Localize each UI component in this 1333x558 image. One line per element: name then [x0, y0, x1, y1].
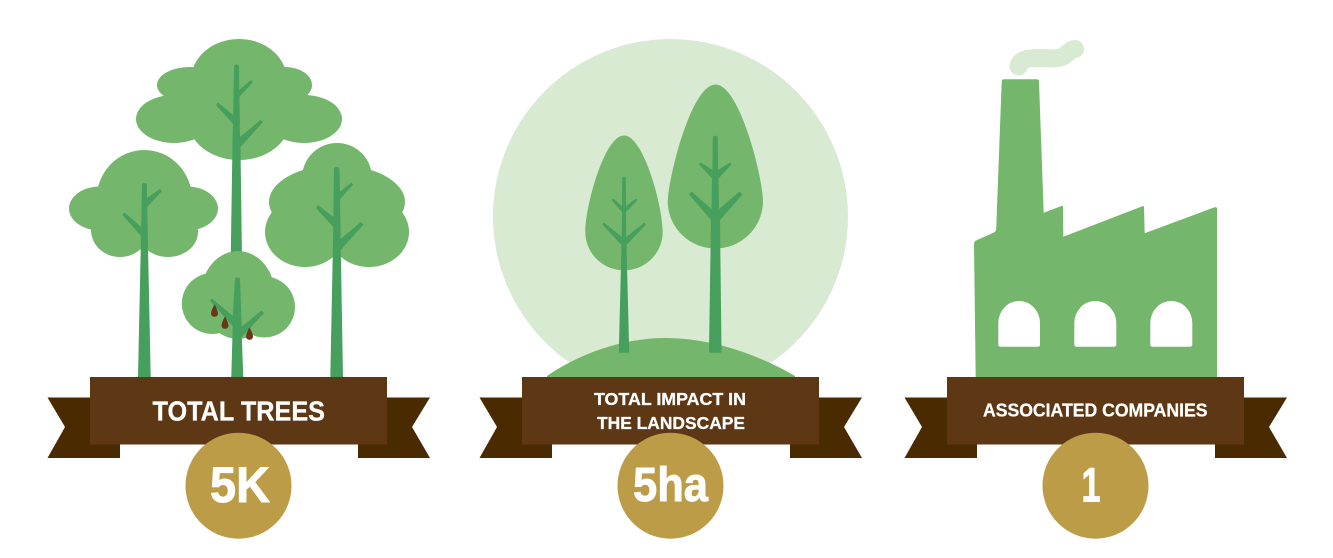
ribbon: total trees	[48, 377, 430, 460]
tree: small front tree with seeds	[182, 251, 295, 377]
tree: right tree	[265, 143, 409, 377]
ribbon: total impact	[480, 377, 862, 460]
heading: total impact in the landscape	[594, 389, 746, 433]
badge: 5ha	[618, 433, 724, 539]
ribbon: associated companies	[904, 377, 1287, 460]
tree: small poplar	[585, 136, 663, 353]
heading: total impact in the landscape: THE LANDSCAPE	[597, 413, 745, 433]
hill	[547, 338, 795, 380]
tree: tall back tree	[136, 39, 342, 260]
icon: factory	[974, 79, 1217, 378]
tree: tall poplar	[668, 84, 763, 353]
badge: 1: 1	[1082, 460, 1100, 512]
smoke	[1018, 49, 1075, 66]
badge: 1	[1042, 433, 1148, 539]
panel: total impact in the landscape	[480, 39, 862, 539]
panel: total trees	[48, 39, 430, 539]
heading: total impact in the landscape: TOTAL IMPACT IN	[594, 389, 746, 409]
tree: left tree	[69, 150, 218, 377]
background circle	[493, 39, 848, 394]
heading: total trees: TOTAL TREES	[152, 396, 325, 426]
badge: 5ha: 5ha	[633, 459, 708, 512]
seeds	[211, 304, 253, 340]
badge: 5K	[186, 433, 292, 539]
badge: 5K: 5K	[210, 457, 270, 513]
heading: associated companies: ASSOCIATED COMPANIES	[983, 401, 1208, 421]
panel: associated companies	[904, 49, 1287, 539]
